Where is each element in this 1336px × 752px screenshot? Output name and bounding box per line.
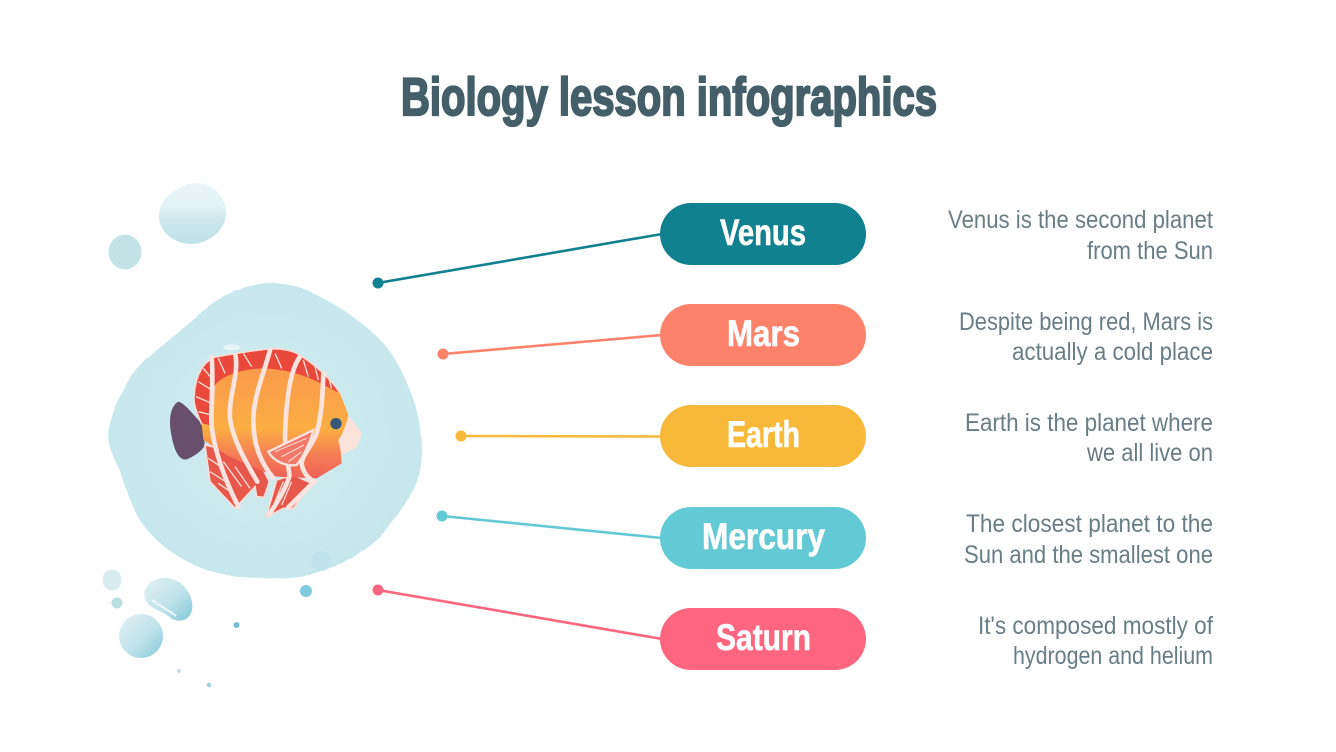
bubble: upper small (108, 234, 142, 270)
fish face (338, 415, 362, 455)
fish highlight (223, 344, 240, 350)
pill: Earth: Earth (727, 414, 800, 455)
fish body (202, 368, 349, 478)
fish stripes (211, 350, 323, 514)
fish pectoral fin (268, 430, 313, 465)
bubble: lower round (119, 614, 163, 658)
description: Mars: actually a cold place (1012, 338, 1213, 366)
description: Saturn (978, 612, 1213, 670)
pill: Mercury: Mercury (702, 516, 825, 557)
dot bubbles (177, 585, 312, 687)
description: Mercury: The closest planet to the (966, 510, 1213, 538)
pill: Mars (660, 304, 866, 366)
fish dorsal fin (194, 349, 341, 427)
pill: Saturn (660, 608, 866, 670)
description: Venus: Venus is the second planet (948, 206, 1213, 234)
bubble: upper large (159, 183, 226, 244)
pill: Mars: Mars (727, 313, 800, 354)
description: Venus: from the Sun (1087, 237, 1213, 265)
description: Mars (959, 308, 1213, 366)
description: Earth: we all live on (1086, 439, 1213, 467)
description: Saturn: It's composed mostly of (978, 612, 1213, 640)
pill: Earth (660, 405, 866, 467)
fish lower fin rear (205, 445, 269, 508)
title: Biology lesson infographics (401, 68, 937, 127)
description: Saturn: hydrogen and helium (1013, 642, 1213, 670)
pill: Venus (660, 203, 866, 265)
description: Mercury: Sun and the smallest one (964, 541, 1213, 569)
bubble: kidney shape (144, 578, 192, 621)
connector: Mercury (436, 510, 662, 538)
fish (170, 344, 362, 517)
water blob (108, 283, 422, 578)
illustration: watercolor fish in bubble (102, 183, 422, 687)
connector: Venus (372, 234, 662, 288)
description: Mercury (964, 510, 1213, 569)
description: Earth (965, 409, 1213, 467)
connector: Saturn (372, 584, 662, 639)
connector: Earth (456, 430, 662, 442)
blob spot (311, 551, 331, 571)
pill: Saturn: Saturn (716, 617, 811, 658)
fish eye (330, 418, 342, 429)
fish tail (170, 402, 205, 459)
bubble: lower small (102, 570, 122, 590)
pill: Mercury (660, 507, 866, 569)
pill: Venus: Venus (720, 212, 806, 253)
fish lower fin front (266, 475, 312, 517)
description: Venus (948, 206, 1213, 265)
connector: Mars (438, 335, 662, 360)
bubble: lower tiny (112, 598, 122, 608)
description: Earth: Earth is the planet where (965, 409, 1213, 437)
description: Mars: Despite being red, Mars is (959, 308, 1213, 336)
